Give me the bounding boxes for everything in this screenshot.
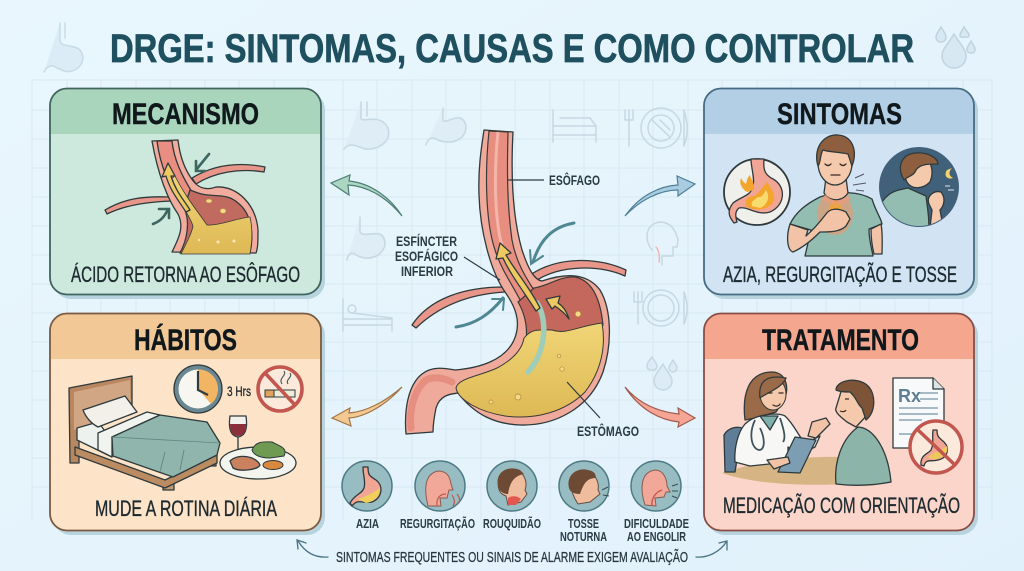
caption: habitos: MUDE A ROTINA DIÁRIA bbox=[95, 496, 277, 521]
compression arrows bbox=[456, 223, 574, 327]
diaphragm right bbox=[530, 260, 626, 282]
panel: tratamento bbox=[704, 314, 978, 535]
icon: faint stomach beside title bbox=[44, 23, 83, 72]
symptom label: dificuldade ao engolir: AO ENGOLIR bbox=[627, 530, 686, 544]
icon: plate with food bbox=[220, 442, 296, 479]
icon: wine glass bbox=[229, 416, 247, 450]
illustration: bed bbox=[69, 376, 220, 490]
symptom label: dificuldade ao engolir bbox=[624, 517, 689, 544]
icon: stomach with flame bbox=[724, 159, 790, 225]
label: estomago: ESTÔMAGO bbox=[577, 424, 639, 439]
symptom icon: rouquidao bbox=[487, 461, 537, 511]
symptom icon: regurgitacao bbox=[415, 461, 465, 511]
icon: clock bbox=[174, 365, 222, 413]
icon: faint water drops beside title bbox=[936, 27, 975, 68]
symptom label: tosse noturna bbox=[560, 517, 607, 544]
arrow: to habitos bbox=[332, 387, 402, 426]
arrows: sphincter pressure bbox=[153, 154, 209, 224]
icon: faint head bbox=[647, 222, 678, 265]
symptom icon: azia bbox=[342, 461, 392, 511]
reflux stream green bbox=[528, 303, 544, 372]
label: esfincter: ESFÍNCTER bbox=[396, 234, 457, 249]
arrow: footer right bbox=[696, 541, 727, 557]
panel: mecanismo bbox=[50, 88, 325, 299]
heading: tratamento: TRATAMENTO bbox=[762, 324, 919, 357]
symptom label: rouquidao: ROUQUIDÃO bbox=[483, 516, 541, 531]
label: esfincter: INFERIOR bbox=[401, 264, 453, 279]
faint background icons bbox=[343, 102, 687, 390]
heading: mecanismo: MECANISMO bbox=[112, 98, 259, 131]
symptom icon: dificuldade ao engolir bbox=[631, 461, 681, 511]
icon: faint plate 2 bbox=[634, 290, 687, 326]
illustration: doctor and patient bbox=[722, 372, 891, 485]
esophagus lumen bbox=[487, 131, 534, 304]
illustration: refluxo no esfíncter bbox=[105, 140, 265, 254]
stomach upper interior bbox=[518, 277, 603, 340]
diaphragm left bbox=[412, 287, 505, 328]
arrow: to mecanismo bbox=[331, 175, 402, 216]
icon: faint stomach 2 bbox=[426, 108, 466, 145]
symptom icon: tosse noturna bbox=[559, 461, 609, 511]
heading: habitos: HÁBITOS bbox=[134, 323, 237, 357]
label: esfincter: ESOFÁGICO bbox=[395, 249, 458, 264]
small arrow inside stomach bbox=[546, 296, 569, 319]
bubbles bbox=[489, 311, 581, 404]
arrow: to sintomas bbox=[625, 176, 695, 216]
duodenum shading bbox=[411, 378, 452, 428]
symptom label: regurgitacao: REGURGITAÇÃO bbox=[400, 516, 475, 531]
pointer lines bbox=[464, 180, 600, 418]
icon: faint drops bbox=[647, 357, 677, 390]
heading: sintomas: SINTOMAS bbox=[777, 98, 902, 131]
label: esfincter bbox=[395, 234, 458, 279]
stomach acid bbox=[456, 323, 603, 417]
symptom label: tosse noturna: NOTURNA bbox=[560, 530, 607, 544]
icon: night coughing bbox=[879, 147, 959, 227]
icon: faint stomach 3 bbox=[347, 217, 385, 260]
reflux arrow yellow bbox=[496, 243, 540, 311]
stomach outer wall and duodenum bbox=[406, 130, 609, 434]
caption: mecanismo: ÁCIDO RETORNA AO ESÔFAGO bbox=[71, 262, 300, 287]
icon: faint person in bed bbox=[343, 299, 392, 331]
symptom label: tosse noturna: TOSSE bbox=[568, 517, 599, 531]
arrow: to tratamento bbox=[625, 387, 695, 427]
central stomach diagram bbox=[406, 130, 626, 434]
icon: no smoking bbox=[258, 367, 302, 411]
arrow: footer left bbox=[297, 540, 328, 557]
illustration: man with heartburn bbox=[788, 135, 882, 256]
icon: prescription document: Rx bbox=[898, 386, 921, 406]
icon: prescription document bbox=[893, 378, 944, 448]
symptom label: dificuldade ao engolir: DIFICULDADE bbox=[624, 517, 689, 531]
icon: faint plate 1 bbox=[625, 108, 687, 148]
icon: faint stomach 1 bbox=[344, 102, 389, 149]
footer note: SINTOMAS FREQUENTES OU SINAIS DE ALARME EXIGEM AVALIAÇÃO bbox=[336, 549, 688, 566]
panel: sintomas bbox=[704, 88, 978, 299]
symptom label: azia: AZIA bbox=[356, 517, 379, 531]
panel: habitos bbox=[50, 314, 325, 535]
icon: faint bed 1 bbox=[553, 110, 596, 142]
icon: no stomach sign bbox=[910, 421, 962, 473]
label: esofago: ESÔFAGO bbox=[549, 173, 600, 188]
label: 3 hrs: 3 Hrs bbox=[227, 383, 251, 399]
